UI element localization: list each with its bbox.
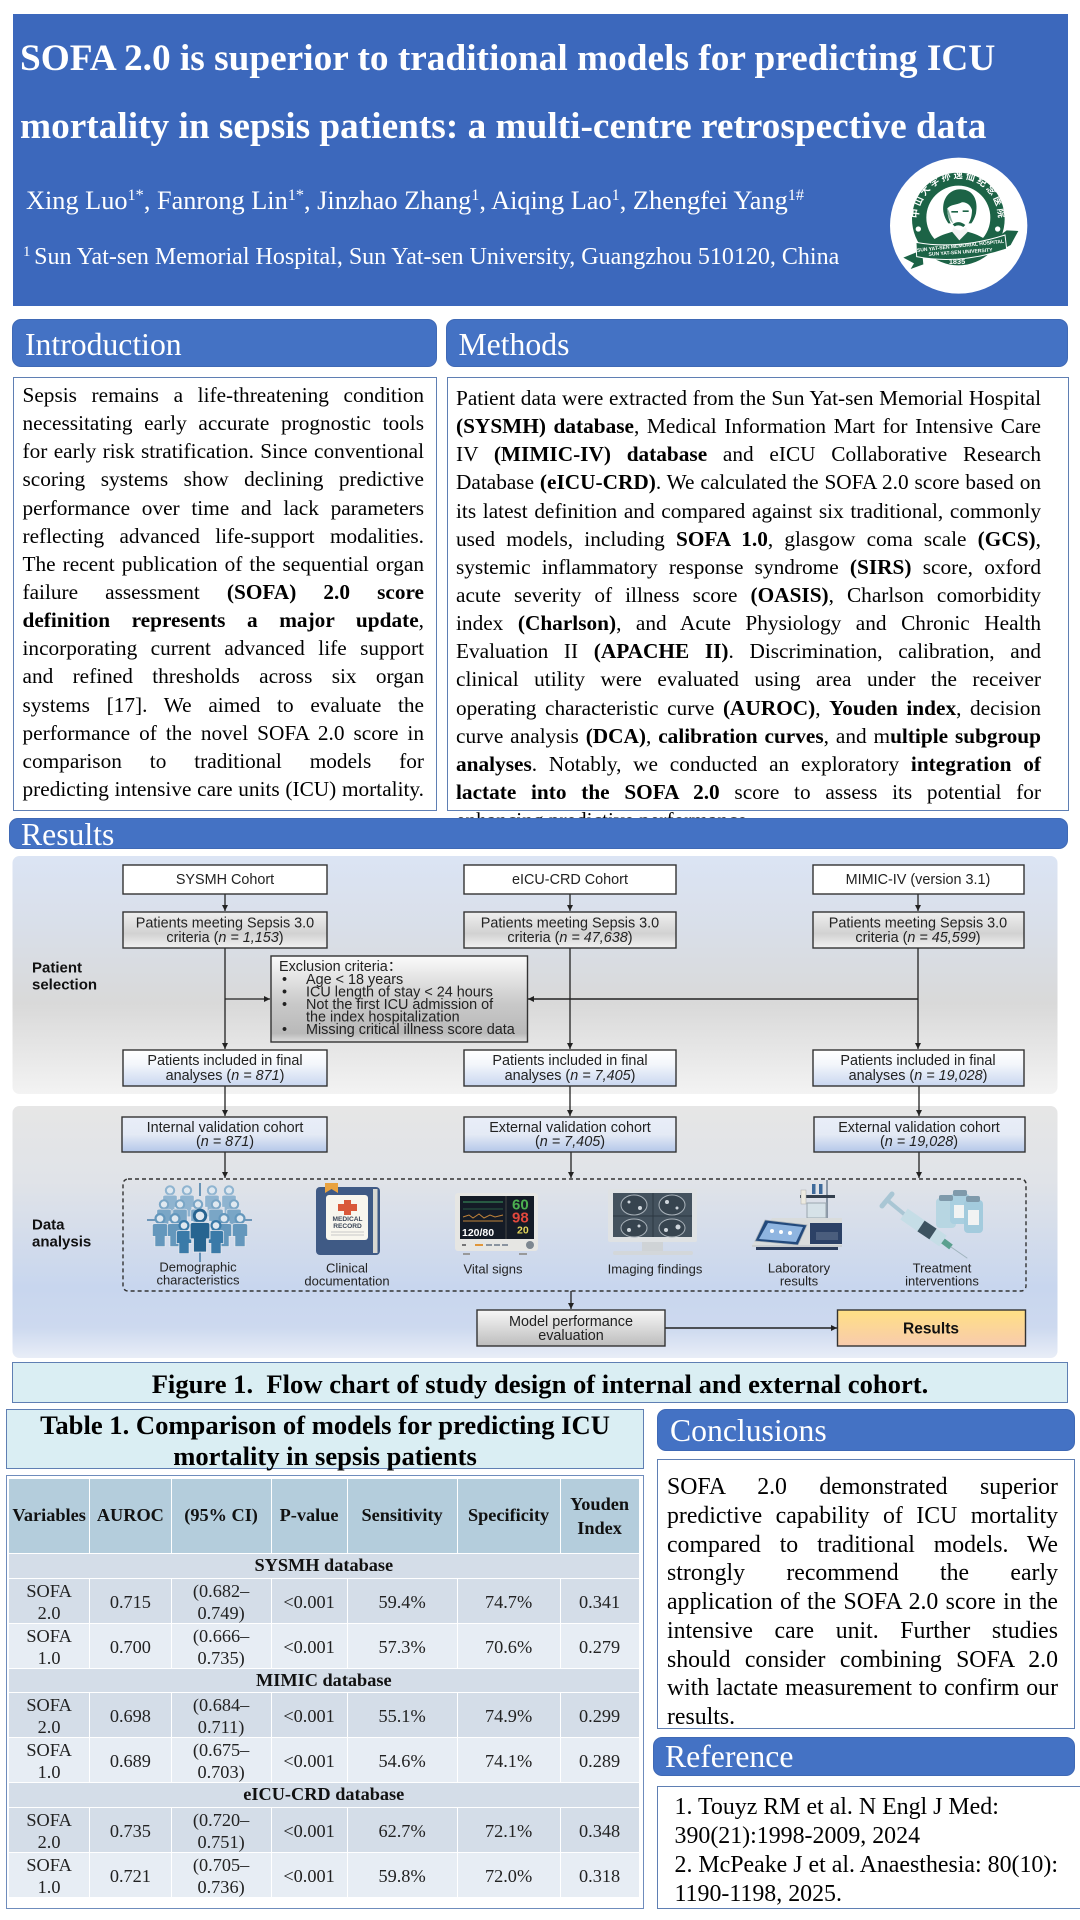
table of model comparison: 0.289: [579, 1751, 620, 1771]
box: MIMIC sepsis: [813, 912, 1024, 948]
icon: demographic crowd: [147, 1183, 252, 1262]
box: model performance evaluation: evaluation: [538, 1328, 604, 1344]
icon labels: results: [780, 1274, 819, 1288]
table of model comparison: SOFA: [26, 1855, 72, 1875]
box: SYSMH final: [123, 1050, 327, 1086]
panel: introduction text: scoring systems show declining predictive: [22, 467, 424, 491]
box: external validation eICU: [464, 1117, 676, 1152]
box: MIMIC-IV: [813, 865, 1024, 894]
icon: laboratory analyser: [752, 1180, 842, 1250]
icon labels: documentation: [304, 1274, 390, 1288]
panel: conclusions text: SOFA 2.0 demonstrated superior: [667, 1474, 1058, 1500]
icon labels: characteristics: [156, 1272, 240, 1288]
box: eICU sepsis: Patients meeting Sepsis 3.0: [481, 916, 659, 932]
panel: methods text: systemic inflammatory response syndrome (SIRS) score, oxford: [456, 555, 1041, 579]
table of model comparison: SYSMH database: [254, 1555, 393, 1575]
table of model comparison: 57.3%: [378, 1637, 426, 1657]
table of model comparison: Sensitivity: [361, 1505, 443, 1525]
heading: introduction: Introduction: [25, 327, 182, 362]
panel: introduction text: performance over time and lack parameters: [22, 496, 424, 520]
panel: references: 1. Touyz RM et al. N Engl J Med:: [674, 1794, 999, 1820]
box: SYSMH sepsis: [123, 912, 327, 948]
table caption: Table 1. Comparison of models for predicting ICU: [40, 1410, 610, 1440]
icon: medical record: [316, 1183, 380, 1255]
panel: patient selection background: [12, 856, 1058, 1094]
table of model comparison: 72.0%: [485, 1866, 532, 1886]
panel: data analysis background: [12, 1106, 1058, 1358]
table of model comparison: P-value: [280, 1505, 339, 1525]
box: MIMIC final: Patients included in final: [840, 1053, 996, 1069]
icon labels: Imaging findings: [608, 1262, 703, 1276]
box: model performance evaluation: [477, 1310, 665, 1346]
icon: vital signs monitor: 60: [512, 1196, 529, 1214]
box: exclusion criteria: •: [282, 997, 287, 1013]
table of model comparison: 0.735: [110, 1821, 151, 1841]
box: results: Results: [903, 1320, 959, 1338]
table of model comparison: 1.0: [38, 1762, 61, 1782]
label: patient selection: Patient: [32, 960, 82, 976]
table of model comparison: 0.735): [197, 1648, 245, 1668]
panel: conclusions text: application of the SOFA 2.0 score in the: [667, 1589, 1058, 1615]
table caption: [6, 1409, 644, 1469]
table of model comparison: 0.749): [197, 1602, 245, 1622]
panel: methods text: used models, including SOFA 1.0, glasgow coma scale (GCS),: [456, 527, 1041, 551]
table of model comparison: 0.715: [110, 1592, 151, 1612]
table of model comparison: (0.684–: [193, 1695, 249, 1715]
panel: conclusions text: [657, 1459, 1075, 1729]
table of model comparison: Variables: [12, 1505, 86, 1525]
table of model comparison: SOFA: [26, 1695, 72, 1715]
box: eICU sepsis: [464, 912, 676, 948]
table of model comparison: 2.0: [38, 1832, 61, 1852]
table of model comparison: <0.001: [283, 1821, 335, 1841]
title: [20, 38, 995, 147]
panel: introduction text: Sepsis remains a life-threatening condition: [22, 383, 424, 407]
heading: results: [9, 818, 1068, 849]
box: external validation MIMIC: External validation cohort: [838, 1120, 1000, 1136]
heading: introduction: [12, 319, 437, 367]
icon: medical record: MEDICAL: [332, 1216, 363, 1223]
table of model comparison: 0.689: [110, 1751, 151, 1771]
panel: introduction text: [13, 376, 437, 811]
panel: introduction text: incorporating current advanced life support: [22, 636, 424, 660]
box: SYSMH final: Patients included in final: [147, 1053, 303, 1069]
table of model comparison: 0.299: [579, 1706, 620, 1726]
icon labels: Treatment: [913, 1260, 972, 1276]
icon labels: Vital signs: [463, 1262, 523, 1276]
table of model comparison: eICU-CRD database: [243, 1784, 404, 1804]
panel: conclusions text: with lactate measurement to confirm our: [667, 1675, 1058, 1701]
panel: references: 390(21):1998-2009, 2024: [674, 1823, 920, 1849]
icon: hospital logo: SUN YAT-SEN MEMORIAL HOSPITAL: [917, 239, 1004, 254]
box: eICU sepsis: criteria (n = 47,638): [507, 930, 633, 946]
table of model comparison: 72.1%: [485, 1821, 532, 1841]
figure caption: Figure 1. Flow chart of study design of internal and external cohort.: [152, 1369, 928, 1399]
icon: syringe and vials: [882, 1190, 983, 1258]
icon: imaging monitor: [608, 1189, 697, 1255]
panel: methods text: [447, 376, 1069, 811]
box: results: [838, 1310, 1026, 1346]
heading: reference: [653, 1737, 1075, 1776]
arrows: [225, 894, 919, 1328]
panel: introduction text: predicting intensive care units (ICU) mortality.: [22, 777, 424, 801]
heading: methods: [446, 319, 1068, 367]
panel: methods text: Database (eICU-CRD). We calculated the SOFA 2.0 score based on: [456, 470, 1041, 494]
box: external validation MIMIC: (n = 19,028): [880, 1134, 958, 1150]
panel: methods text: operating characteristic curve (AUROC), Youden index, decision: [456, 696, 1041, 720]
table caption: mortality in sepsis patients: [173, 1441, 477, 1471]
icon: vital signs monitor: 20: [517, 1224, 529, 1236]
table of model comparison: 0.341: [579, 1592, 620, 1612]
table of model comparison: (0.720–: [193, 1810, 249, 1830]
table of model comparison: AUROC: [97, 1505, 164, 1525]
panel: methods text: its latest definition and compared against six traditional, commonly: [456, 499, 1041, 523]
panel: introduction text: necessitating early accurate prognostic tools: [22, 411, 424, 435]
panel: references: [657, 1786, 1080, 1909]
table of model comparison: 74.7%: [485, 1592, 532, 1612]
box: exclusion criteria: •: [282, 1022, 287, 1038]
figure caption: [12, 1362, 1068, 1403]
table of model comparison: 0.348: [579, 1821, 620, 1841]
panel: introduction text: performance of the novel SOFA 2.0 score in: [22, 721, 424, 745]
heading: results: Results: [21, 817, 114, 852]
box: internal validation: Internal validation cohort: [147, 1120, 303, 1136]
table of model comparison: 0.711): [198, 1716, 244, 1736]
icon labels: Laboratory: [768, 1260, 831, 1276]
table of model comparison: 62.7%: [378, 1821, 426, 1841]
box: MIMIC-IV: MIMIC-IV (version 3.1): [846, 872, 990, 888]
table of model comparison: (95% CI): [184, 1505, 258, 1525]
icon: hospital logo: 1835: [949, 257, 965, 266]
title: mortality in sepsis patients: a multi-centre retrospective data: [20, 106, 986, 147]
table of model comparison: 0.700: [110, 1637, 151, 1657]
box: eICU final: Patients included in final: [492, 1053, 648, 1069]
panel: methods text: Evaluation II (APACHE II). Discrimination, calibration, and: [456, 639, 1041, 663]
panel: introduction text: definition represents a major update,: [22, 608, 424, 632]
panel: introduction text: for early risk stratification. Since conventional: [22, 439, 424, 463]
box: external validation eICU: (n = 7,405): [535, 1134, 605, 1150]
box: SYSMH sepsis: criteria (n = 1,153): [166, 930, 284, 946]
table of model comparison: (0.666–: [193, 1626, 249, 1646]
table of model comparison: 59.8%: [378, 1866, 426, 1886]
box: exclusion criteria: the index hospitalization: [306, 1010, 460, 1026]
table of model comparison: (0.682–: [193, 1581, 249, 1601]
table of model comparison: 74.1%: [485, 1751, 532, 1771]
box: MIMIC final: analyses (n = 19,028): [849, 1068, 987, 1084]
table of model comparison: 59.4%: [378, 1592, 426, 1612]
box: eICU-CRD cohort: eICU-CRD Cohort: [512, 872, 628, 888]
table of model comparison: 0.751): [197, 1832, 245, 1852]
box: SYSMH sepsis: Patients meeting Sepsis 3.0: [136, 916, 314, 932]
box: SYSMH final: analyses (n = 871): [166, 1068, 284, 1084]
table of model comparison: 1.0: [38, 1876, 61, 1896]
panel: methods text: acute severity of illness score (OASIS), Charlson comorbidity: [456, 583, 1041, 607]
heading: conclusions: Conclusions: [670, 1413, 827, 1448]
panel: introduction text: comparison to traditional models for: [22, 749, 424, 773]
icon: hospital logo: [890, 158, 1028, 294]
box: exclusion criteria: Missing critical illness score data: [306, 1022, 515, 1038]
table of model comparison: 0.721: [110, 1866, 151, 1886]
header banner: [12, 14, 1068, 306]
box: external validation eICU: External validation cohort: [489, 1120, 651, 1136]
authors: Xing Luo1*, Fanrong Lin1*, Jinzhao Zhang1, Aiqing Lao1, Zhengfei Yang1#: [26, 185, 804, 214]
table of model comparison: 70.6%: [485, 1637, 532, 1657]
table of model comparison: 0.698: [110, 1706, 151, 1726]
table of model comparison: <0.001: [283, 1866, 335, 1886]
panel: methods text: index (Charlson), and Acute Physiology and Chronic Health: [456, 611, 1041, 635]
table of model comparison: 2.0: [38, 1602, 61, 1622]
table of model comparison: 0.736): [197, 1876, 245, 1896]
panel: conclusions text: results.: [667, 1704, 735, 1730]
box: SYSMH cohort: [123, 865, 327, 894]
box: internal validation: [122, 1117, 327, 1152]
panel: table frame: [6, 1475, 644, 1909]
panel: conclusions text: predictive capability of ICU mortality: [667, 1503, 1058, 1529]
box: eICU final: [464, 1050, 676, 1086]
table of model comparison: SOFA: [26, 1581, 72, 1601]
table of model comparison: Youden: [570, 1494, 629, 1514]
table of model comparison: <0.001: [283, 1637, 335, 1657]
text: enhancing predictive performance.: [456, 808, 752, 832]
label: patient selection: [32, 960, 97, 994]
box: exclusion criteria: •: [282, 985, 287, 1001]
icon: hospital logo: 中山大学孙逸仙纪念医院: [912, 172, 1005, 218]
icon: vital signs monitor: [455, 1193, 538, 1254]
table of model comparison: 55.1%: [378, 1706, 426, 1726]
label: data analysis: analysis: [32, 1234, 91, 1250]
box: MIMIC final: [813, 1050, 1024, 1086]
panel: conclusions text: strongly recommend the early: [667, 1560, 1058, 1586]
icon labels: Clinical: [326, 1260, 368, 1276]
box: exclusion criteria: [271, 956, 528, 1042]
table of model comparison: Specificity: [468, 1505, 549, 1525]
panel: references: 1190-1198, 2025.: [674, 1881, 842, 1907]
icon labels: Demographic: [159, 1260, 237, 1274]
title: SOFA 2.0 is superior to traditional models for predicting ICU: [20, 38, 995, 78]
panel: introduction text: and refined thresholds across six organ: [22, 664, 424, 688]
table of model comparison: (0.675–: [193, 1740, 249, 1760]
heading: reference: Reference: [665, 1739, 793, 1774]
table of model comparison: <0.001: [283, 1751, 335, 1771]
table of model comparison: SOFA: [26, 1740, 72, 1760]
panel: methods text: (SYSMH) database, Medical Information Mart for Intensive Care: [456, 414, 1041, 438]
table of model comparison: (0.705–: [193, 1855, 249, 1875]
table of model comparison: 0.318: [579, 1866, 620, 1886]
panel: methods text: lactate into the SOFA 2.0 score to assess its potential for: [456, 780, 1041, 804]
label: data analysis: Data: [32, 1216, 65, 1234]
box: eICU-CRD cohort: [464, 865, 676, 894]
panel: introduction text: systems [17]. We aimed to evaluate the: [22, 693, 424, 717]
affiliation: 1 Sun Yat-sen Memorial Hospital, Sun Yat-sen University, Guangzhou 510120, China: [23, 244, 839, 270]
flow chart figure: [12, 856, 1058, 1358]
box: MIMIC sepsis: criteria (n = 45,599): [855, 930, 981, 946]
box: internal validation: (n = 871): [196, 1134, 254, 1150]
label: data analysis: [32, 1216, 91, 1250]
panel: introduction text: failure assessment (SOFA) 2.0 score: [22, 580, 424, 604]
table of model comparison: [9, 1479, 639, 1897]
heading: methods: Methods: [458, 327, 569, 362]
panel: conclusions text: should consider combining SOFA 2.0: [667, 1646, 1058, 1672]
panel: introduction text: The recent publication of the sequential organ: [22, 552, 424, 576]
table of model comparison: 54.6%: [378, 1751, 426, 1771]
panel: references: 2. McPeake J et al. Anaesthesia: 80(10):: [674, 1852, 1058, 1878]
box: SYSMH cohort: SYSMH Cohort: [176, 872, 274, 888]
box: exclusion criteria: •: [282, 972, 287, 988]
box: external validation MIMIC: [814, 1117, 1025, 1152]
icon labels: interventions: [905, 1274, 979, 1288]
panel: conclusions text: intensive care unit. Further studies: [667, 1618, 1058, 1644]
box: exclusion criteria: ICU length of stay < 24 hours: [306, 985, 493, 1001]
panel: methods text: clinical utility were evaluated using area under the receiver: [456, 667, 1041, 691]
label: patient selection: selection: [32, 976, 97, 994]
table of model comparison: 2.0: [38, 1716, 61, 1736]
panel: conclusions text: compared to traditional models. We: [667, 1532, 1058, 1558]
panel: methods text: analyses. Notably, we conducted an exploratory integration of: [456, 752, 1041, 776]
icon: medical record: RECORD: [333, 1223, 362, 1230]
table of model comparison: MIMIC database: [256, 1670, 392, 1690]
panel: methods text: curve analysis (DCA), calibration curves, and multiple subgroup: [456, 724, 1041, 748]
box: MIMIC sepsis: Patients meeting Sepsis 3.0: [829, 916, 1007, 932]
dashed data frame: [123, 1179, 1026, 1291]
table of model comparison: SOFA: [26, 1626, 72, 1646]
table of model comparison: 0.279: [579, 1637, 620, 1657]
box: exclusion criteria: Not the first ICU admission of: [306, 997, 494, 1013]
box: exclusion criteria: Age < 18 years: [306, 972, 403, 988]
table of model comparison: 1.0: [38, 1648, 61, 1668]
box: model performance evaluation: Model performance: [509, 1314, 633, 1330]
icon: vital signs monitor: 120/80: [462, 1227, 494, 1239]
heading: conclusions: [657, 1409, 1075, 1451]
table of model comparison: <0.001: [283, 1592, 335, 1612]
table of model comparison: 74.9%: [485, 1706, 532, 1726]
box: eICU final: analyses (n = 7,405): [505, 1068, 635, 1084]
icon: vital signs monitor: 98: [512, 1210, 529, 1226]
table of model comparison: SOFA: [26, 1810, 72, 1830]
table of model comparison: <0.001: [283, 1706, 335, 1726]
table of model comparison: 0.703): [197, 1762, 245, 1782]
box: exclusion criteria: Exclusion criteria：: [279, 959, 402, 975]
panel: methods text: Patient data were extracted from the Sun Yat-sen Memorial Hospital: [456, 386, 1041, 410]
table of model comparison: Index: [577, 1518, 622, 1538]
panel: introduction text: reflecting advanced life-support modalities.: [22, 524, 424, 548]
icon labels: [156, 1260, 979, 1288]
panel: methods text: IV (MIMIC-IV) database and eICU Collaborative Research: [456, 442, 1041, 466]
icon: hospital logo: SUN YAT-SEN UNIVERSITY: [928, 247, 993, 258]
